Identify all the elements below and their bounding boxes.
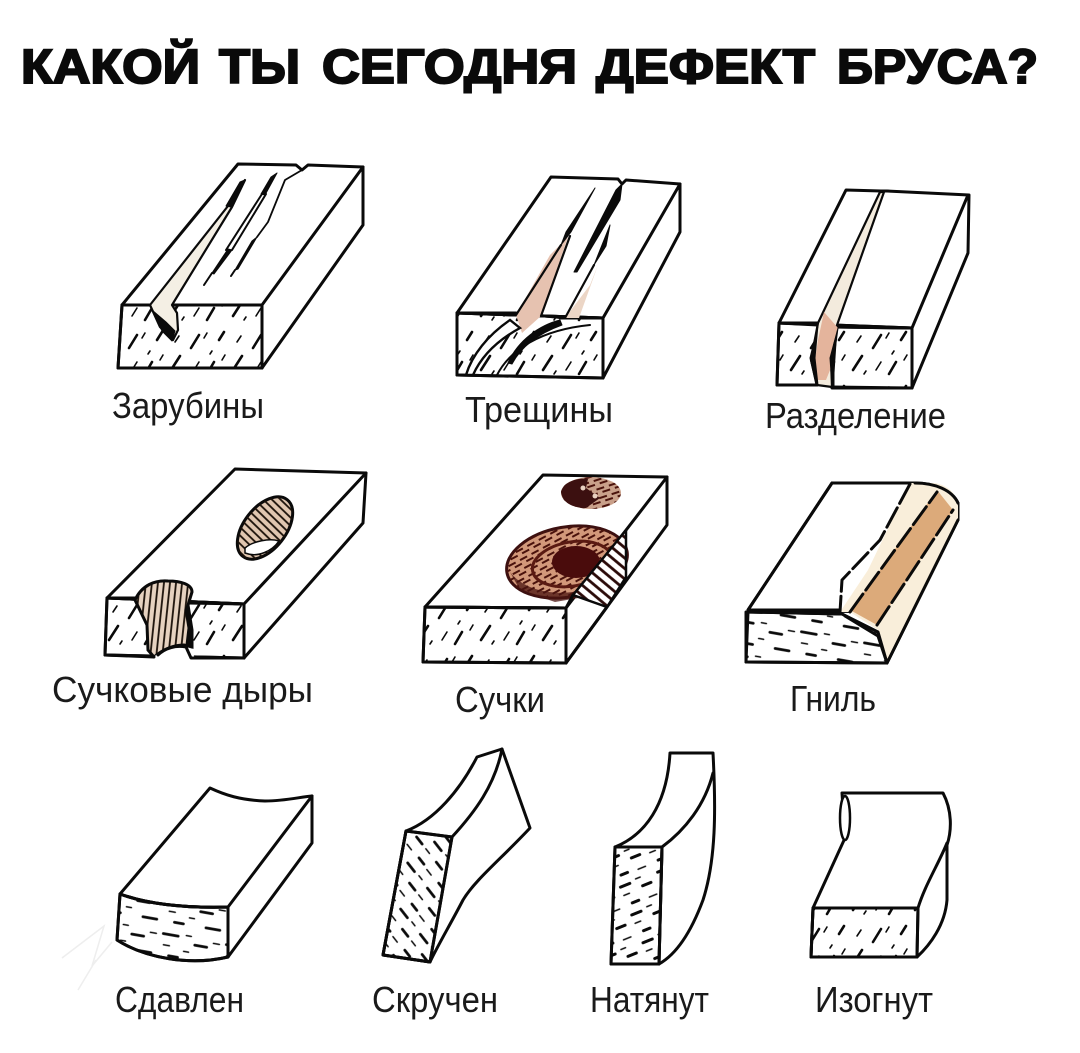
label: splitting: Разделение [765, 395, 946, 436]
label: notches: Зарубины [112, 385, 264, 426]
label: twisted: Скручен [372, 979, 498, 1020]
watermark [62, 926, 112, 990]
panel: notches [112, 164, 363, 426]
beam: warped [611, 753, 715, 964]
panel: twisted [372, 749, 530, 1020]
panel: bowed [811, 793, 950, 1020]
title: ДЕФЕКТ [596, 41, 815, 94]
title: КАКОЙ [21, 39, 200, 94]
beam: knots [423, 475, 667, 663]
panel: splitting [765, 190, 969, 436]
beam: knot holes [105, 469, 366, 668]
beam: crushed [117, 788, 312, 961]
beam: cracks [457, 177, 680, 378]
label: knots: Сучки [455, 679, 545, 720]
label: cracks: Трещины [465, 389, 613, 430]
panel: knot holes [52, 469, 366, 710]
panel: crushed [115, 788, 312, 1020]
title: СЕГОДНЯ [322, 41, 577, 94]
label: crushed: Сдавлен [115, 979, 244, 1020]
title: БРУСА? [837, 41, 1038, 94]
panel: knots [423, 475, 667, 720]
panel: warped [590, 753, 715, 1020]
panel: rot [746, 483, 958, 719]
title [21, 39, 1038, 94]
beam: twisted [383, 749, 530, 962]
label: knot holes: Сучковые дыры [52, 669, 313, 710]
label: rot: Гниль [790, 678, 876, 719]
panel: cracks [457, 177, 680, 430]
label: warped: Натянут [590, 979, 709, 1020]
label: bowed: Изогнут [815, 979, 933, 1020]
beam: notches [118, 164, 363, 368]
beam: splitting [777, 190, 969, 388]
beam: bowed [811, 793, 950, 957]
beam: rot [746, 483, 958, 663]
title: ТЫ [219, 41, 300, 94]
